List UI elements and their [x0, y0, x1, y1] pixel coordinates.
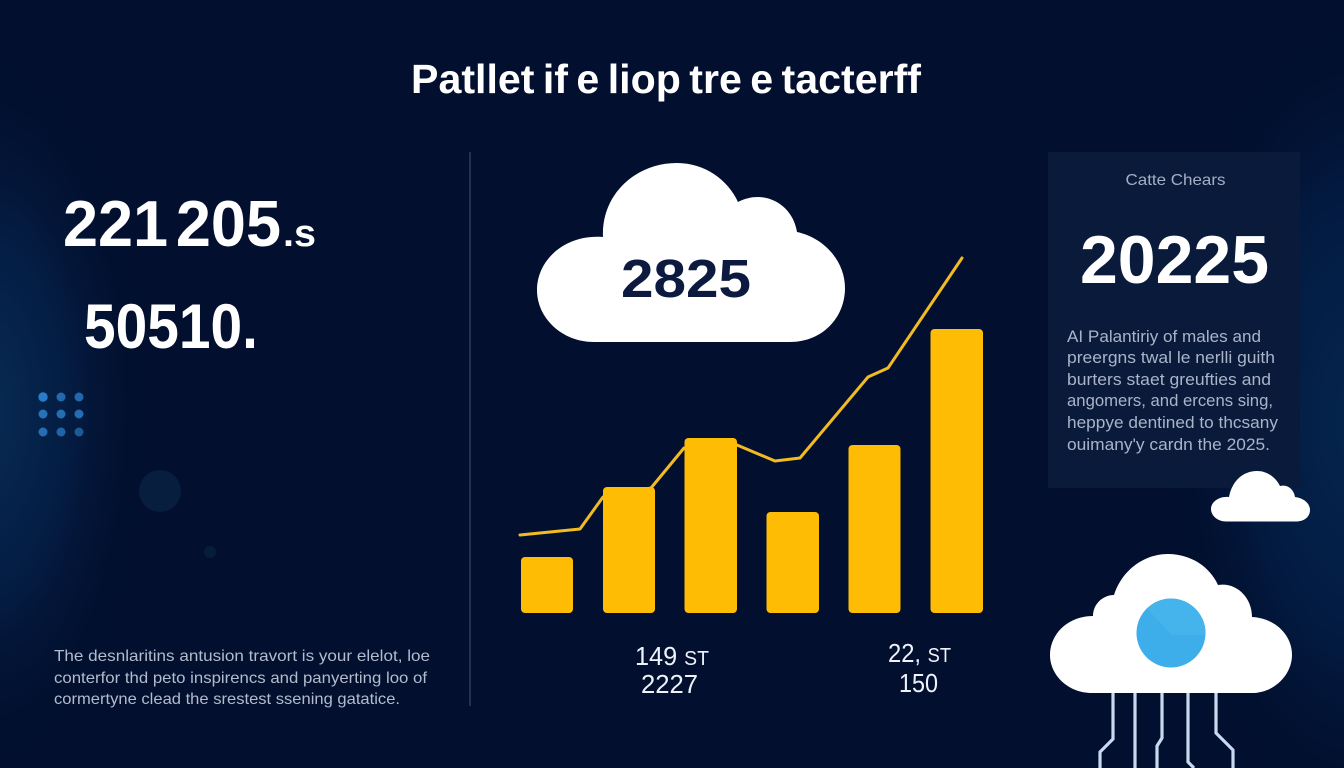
- cloud shape: [1050, 554, 1292, 693]
- stat: first figure: .s: [283, 213, 316, 255]
- card heading: Catte Chears: [1126, 172, 1226, 189]
- decorative faint circles: [139, 470, 216, 558]
- icon: small cloud: [1211, 471, 1310, 522]
- text block: left description: The desnlaritins antusion travort is your elelot, loe: [54, 648, 430, 665]
- icon: dot grid: [38, 392, 84, 436]
- card description: burters staet greufties and: [1067, 371, 1271, 389]
- bars: [521, 329, 983, 613]
- card description: [1067, 328, 1279, 454]
- card description: ouimany'y cardn the 2025.: [1067, 436, 1270, 454]
- chart label: left: 149 ST: [635, 641, 709, 671]
- chart label: left: [635, 641, 709, 699]
- chart label: right: [888, 638, 951, 698]
- card description: AI Palantiriy of males and: [1067, 328, 1261, 346]
- card figure: 20225: [1080, 222, 1269, 298]
- stat: first figure: 221 205: [63, 187, 281, 260]
- title: Patllet if e liop tre e tacterff: [411, 56, 921, 102]
- text block: left description: conterfor thd peto inspirencs and panyerting loo of: [54, 670, 428, 687]
- chart: bars with trend line: [520, 258, 983, 613]
- card description: angomers, and ercens sing,: [1067, 392, 1273, 410]
- chart label: left: 2227: [641, 669, 698, 699]
- card description: preergns twal le nerlli guith: [1067, 349, 1275, 367]
- text block: left description: cormertyne clead the srestest ssening gatatice.: [54, 691, 400, 708]
- icon: cloud with circuit lines: [1050, 554, 1292, 768]
- circuit lines: [1100, 690, 1233, 768]
- icon: cloud with year: [537, 163, 845, 342]
- trend line: [520, 258, 962, 535]
- chart label: right: 22, ST: [888, 638, 951, 668]
- cloud year label: 2825: [621, 249, 751, 309]
- card description: heppye dentined to thcsany: [1067, 414, 1279, 432]
- text block: left description: [54, 648, 430, 708]
- blue circle: [1136, 598, 1206, 668]
- panel: left statistics: [63, 187, 316, 362]
- stat: second figure: 50510.: [84, 292, 258, 362]
- chart label: right: 150: [899, 668, 938, 698]
- panel: right card: [1048, 152, 1300, 488]
